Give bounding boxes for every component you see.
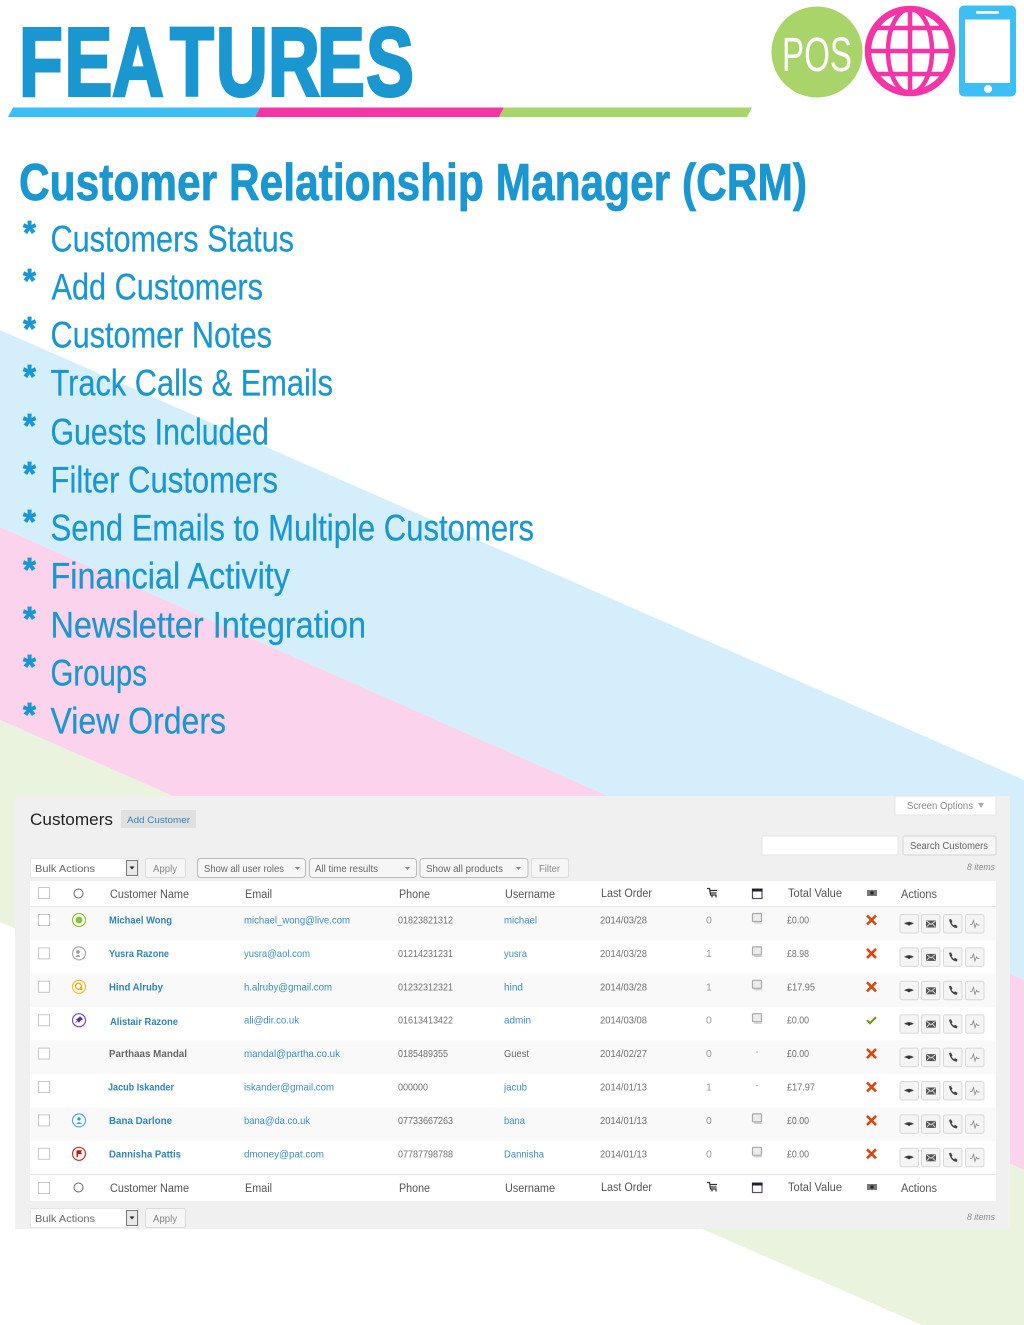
row: Dannisha Pattis: £0.00	[787, 1148, 809, 1160]
row: Yusra Razone: 2014/03/28	[600, 948, 647, 960]
list item: Track Calls & Emails: Track Calls & Emails	[50, 362, 333, 404]
row: Jacub Iskander: 2014/01/13	[600, 1082, 647, 1094]
row: Parthaas Mandal	[30, 1041, 996, 1074]
list item: Add Customers: Add Customers	[52, 266, 263, 308]
search box: Search Customers	[910, 841, 988, 852]
row: Alistair Razone	[38, 1014, 984, 1033]
list item: View Orders: View Orders	[50, 700, 226, 742]
list item: Groups: Groups	[50, 652, 147, 694]
list item: Filter Customers	[23, 455, 278, 500]
row: Hind Alruby: hind	[504, 981, 523, 993]
row: Dannisha Pattis: 2014/01/13	[600, 1148, 647, 1160]
row: Yusra Razone: yusra@aol.com	[244, 948, 310, 960]
bottom toolbar: bulk actions: Bulk Actions	[35, 1213, 95, 1225]
title: FEATURES: FEATURES	[19, 9, 414, 117]
toolbar: bulk actions and filters: Show all products	[426, 864, 503, 875]
row: Parthaas Mandal: 0185489355	[398, 1048, 448, 1060]
row: Parthaas Mandal: mandal@partha.co.uk	[244, 1048, 341, 1060]
list item: Customers Status: Customers Status	[50, 218, 294, 260]
toolbar: bulk actions and filters	[30, 858, 568, 878]
list item: View Orders: *	[23, 696, 36, 733]
search box	[762, 836, 996, 855]
row: Hind Alruby: 2014/03/28	[600, 981, 647, 993]
row: Jacub Iskander: 000000	[398, 1082, 428, 1094]
bottom toolbar: bulk actions	[30, 1208, 186, 1228]
row: Michael Wong: 0	[706, 914, 712, 926]
row: Jacub Iskander: Jacub Iskander	[108, 1082, 174, 1094]
list item: Filter Customers: *	[23, 455, 36, 492]
row: Yusra Razone: Yusra Razone	[109, 948, 169, 960]
row: Parthaas Mandal: 0	[706, 1048, 712, 1060]
row: Yusra Razone: yusra	[504, 948, 527, 960]
row: Michael Wong: £0.00	[787, 914, 809, 926]
toolbar: bulk actions and filters: Bulk Actions	[35, 863, 95, 875]
row: Jacub Iskander: £17.97	[787, 1082, 815, 1094]
icon: mobile phone	[959, 6, 1016, 96]
list item: Guests Included	[23, 407, 269, 452]
row: Dannisha Pattis: 07787798788	[398, 1148, 453, 1160]
list item: Guests Included: *	[23, 407, 36, 444]
status icon: green target	[72, 914, 86, 926]
list item: View Orders	[23, 696, 226, 742]
status icon: yellow chat	[72, 980, 86, 993]
list item: Customer Notes: Customer Notes	[50, 314, 272, 356]
bottom toolbar: bulk actions: Apply	[153, 1214, 177, 1225]
table header row: Total Value	[788, 888, 842, 900]
table header row: Actions	[901, 889, 937, 901]
table header row: Customer Name	[110, 889, 189, 901]
toolbar: bulk actions and filters: Show all user roles	[204, 864, 284, 875]
table header row: Last Order	[601, 888, 652, 900]
list item: Groups	[23, 648, 147, 694]
row: Hind Alruby: £17.95	[787, 981, 815, 993]
list item: Customers Status	[23, 214, 294, 260]
icon: globe	[868, 9, 952, 93]
row: Yusra Razone	[38, 947, 984, 966]
list item: Newsletter Integration: Newsletter Integration	[50, 604, 366, 646]
row: Dannisha Pattis	[38, 1147, 984, 1167]
list item: Groups: *	[23, 648, 36, 685]
row: Dannisha Pattis: Dannisha	[504, 1148, 544, 1160]
row: Michael Wong: Michael Wong	[109, 914, 172, 926]
table footer row: Last Order	[601, 1182, 652, 1194]
row: Michael Wong: 2014/03/28	[600, 914, 647, 926]
row: Alistair Razone: admin	[504, 1015, 531, 1027]
row: Hind Alruby: Hind Alruby	[109, 981, 163, 993]
row: Bana Darlone: 2014/01/13	[600, 1115, 647, 1127]
row: Parthaas Mandal: Parthaas Mandal	[109, 1048, 187, 1060]
table footer row: Customer Name	[110, 1183, 189, 1195]
row: Hind Alruby: 01232312321	[398, 981, 453, 993]
row: Alistair Razone: 01613413422	[398, 1015, 453, 1027]
background: diagonal bands	[0, 330, 1024, 1325]
table header row: Username	[505, 889, 555, 901]
table header row	[30, 888, 996, 906]
table footer row: Actions	[901, 1183, 937, 1195]
list item: Send Emails to Multiple Customers: *	[23, 503, 36, 540]
heading: Customer Relationship Manager (CRM): Customer Relationship Manager (CRM)	[19, 154, 807, 212]
list item: Track Calls & Emails: *	[23, 358, 36, 395]
table header row: Phone	[399, 889, 430, 901]
row: Yusra Razone: 01214231231	[398, 948, 453, 960]
row: Michael Wong: michael_wong@live.com	[244, 914, 350, 926]
list item: Add Customers	[23, 262, 263, 308]
row: Michael Wong: michael	[504, 914, 537, 926]
row: Parthaas Mandal: £0.00	[787, 1048, 809, 1060]
row: Bana Darlone: Bana Darlone	[109, 1115, 172, 1127]
item count: top: 8 items	[967, 862, 995, 872]
row: Bana Darlone	[30, 1107, 996, 1141]
tricolour divider bar	[8, 108, 752, 117]
item count: bottom: 8 items	[967, 1212, 995, 1222]
status icon: red flag	[72, 1147, 86, 1160]
row: Hind Alruby: h.alruby@gmail.com	[244, 981, 332, 993]
row: Bana Darlone: bana@da.co.uk	[244, 1115, 311, 1127]
row: Alistair Razone: Alistair Razone	[110, 1016, 178, 1028]
status icon: purple pin	[72, 1014, 86, 1027]
row: Yusra Razone: 1	[706, 948, 712, 960]
status mark: green check	[867, 1017, 876, 1023]
panel: customers admin screenshot	[15, 796, 1010, 1229]
table footer row: Email	[245, 1183, 272, 1195]
row: Alistair Razone: 0	[706, 1015, 712, 1027]
list item: Filter Customers: Filter Customers	[50, 460, 278, 500]
toolbar: bulk actions and filters: Apply	[153, 864, 177, 875]
row: Alistair Razone: ali@dir.co.uk	[244, 1015, 300, 1027]
row: Parthaas Mandal: Guest	[504, 1048, 529, 1060]
table header row: Email	[245, 889, 272, 901]
row: Jacub Iskander: jacub	[503, 1082, 527, 1094]
tab: Screen Options: Screen Options	[907, 801, 973, 812]
row: Dannisha Pattis: Dannisha Pattis	[109, 1148, 181, 1160]
tab: Screen Options	[895, 796, 996, 815]
table footer row: Username	[505, 1183, 555, 1195]
icon: POS circle	[772, 6, 862, 98]
list item: Newsletter Integration: *	[23, 600, 36, 637]
list item: Guests Included: Guests Included	[50, 412, 269, 452]
table footer row: Total Value	[788, 1182, 842, 1194]
status icon: grey users	[72, 947, 86, 960]
row: Hind Alruby: 1	[706, 981, 712, 993]
row: Michael Wong: 01823821312	[398, 914, 453, 926]
list item: Send Emails to Multiple Customers: Send Emails to Multiple Customers	[50, 508, 534, 548]
list item: Add Customers: *	[23, 262, 36, 299]
icon: POS circle: POS	[782, 29, 852, 82]
row: Jacub Iskander	[38, 1082, 984, 1100]
list item: Customer Notes	[23, 310, 272, 356]
list item: Financial Activity: Financial Activity	[50, 556, 290, 596]
button: Add Customer	[121, 810, 196, 828]
toolbar: bulk actions and filters: All time results	[315, 864, 378, 875]
row: Alistair Razone: £0.00	[787, 1015, 809, 1027]
row: Dannisha Pattis: 0	[706, 1148, 712, 1160]
row: Jacub Iskander: iskander@gmail.com	[244, 1082, 334, 1094]
list item: Financial Activity: *	[23, 551, 36, 588]
row: Yusra Razone: £8.98	[787, 948, 809, 960]
row: Bana Darlone: bana	[504, 1115, 525, 1127]
row: Jacub Iskander: 1	[706, 1082, 712, 1094]
row: Michael Wong	[30, 907, 996, 940]
button: Add Customer: Add Customer	[127, 815, 190, 826]
table footer row	[30, 1174, 996, 1195]
row: Dannisha Pattis: dmoney@pat.com	[244, 1148, 324, 1160]
table footer row: Phone	[399, 1183, 430, 1195]
row: Bana Darlone: 0	[706, 1115, 712, 1127]
panel heading: Customers: Customers	[30, 810, 113, 829]
row: Parthaas Mandal: 2014/02/27	[600, 1048, 647, 1060]
list item: Customer Notes: *	[23, 310, 36, 347]
toolbar: bulk actions and filters: Filter	[539, 864, 561, 875]
row: Hind Alruby	[30, 974, 996, 1007]
table: customers	[30, 881, 996, 1201]
row: Alistair Razone: 2014/03/08	[600, 1015, 647, 1027]
status icon: blue person	[72, 1114, 86, 1127]
row: Bana Darlone: 07733667263	[398, 1115, 453, 1127]
list item: Customers Status: *	[23, 214, 36, 251]
feature list	[23, 214, 534, 742]
row: Bana Darlone: £0.00	[787, 1115, 809, 1127]
